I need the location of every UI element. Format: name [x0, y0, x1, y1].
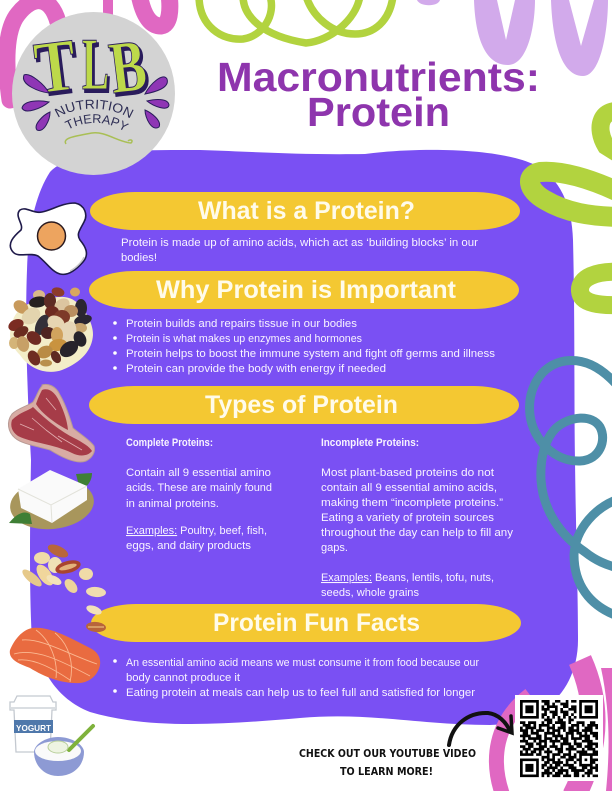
incomplete proteins column: seeds, whole grains — [321, 587, 419, 599]
body text: Protein is made up of amino acids, which act as ‘building blocks’ in our — [121, 237, 479, 249]
logo lettering TLB — [30, 24, 153, 113]
logo — [12, 12, 175, 175]
incomplete proteins column: contain all 9 essential amino acids, — [321, 482, 497, 494]
green squiggle top centre — [199, 0, 393, 43]
logo subtitle: NUTRITION — [54, 100, 134, 118]
call to action text: TO LEARN MORE! — [340, 766, 433, 778]
complete proteins column: eggs, and dairy products — [126, 540, 251, 552]
heading pill — [89, 386, 519, 424]
icon: fried egg — [10, 203, 86, 274]
bullet list: Protein is what makes up enzymes and hormones — [126, 333, 362, 345]
logo lettering TLB: L — [84, 27, 111, 109]
arrow to QR code — [449, 713, 512, 745]
icon: nuts — [20, 542, 106, 633]
bullet list: Protein helps to boost the immune system and fight off germs and illness — [126, 348, 495, 360]
incomplete proteins column: Eating a variety of protein sources — [321, 512, 494, 524]
heading pill: Why Protein is Important — [156, 276, 457, 304]
icon: salmon — [10, 628, 100, 683]
icon: beans — [6, 286, 93, 372]
incomplete proteins column: Most plant-based proteins do not — [321, 467, 494, 479]
icon: tofu — [8, 470, 96, 533]
call to action text: CHECK OUT OUR YOUTUBE VIDEO — [299, 748, 476, 760]
incomplete proteins column: Examples: Beans, lentils, tofu, nuts, — [321, 572, 494, 584]
body text: bodies! — [121, 252, 157, 264]
complete proteins column: in animal proteins. — [126, 498, 219, 510]
heading pill — [91, 604, 521, 642]
purple background panel — [26, 150, 578, 725]
logo: THERAPY — [64, 114, 129, 130]
title: Protein — [307, 89, 450, 135]
bullet list: Eating protein at meals can help us to feel full and satisfied for longer — [126, 687, 476, 699]
bullet list: Protein can provide the body with energy if needed — [126, 363, 386, 375]
QR code — [515, 695, 603, 781]
incomplete proteins column: gaps. — [321, 542, 348, 554]
logo splash drops — [22, 75, 169, 130]
incomplete proteins column: making them “incomplete proteins.” — [321, 497, 504, 509]
heading pill — [90, 192, 520, 230]
heading pill: What is a Protein? — [198, 197, 415, 225]
heading pill: Types of Protein — [205, 391, 398, 419]
incomplete proteins column: Incomplete Proteins: — [321, 437, 419, 449]
icon: steak — [8, 384, 95, 462]
incomplete proteins column: throughout the day can help to fill any — [321, 527, 514, 539]
complete proteins column: Examples: Poultry, beef, fish, — [126, 525, 267, 537]
bullet list: body cannot produce it — [126, 672, 240, 684]
icon: yogurt — [10, 696, 93, 776]
heading pill: Protein Fun Facts — [213, 609, 420, 637]
green squiggle right upper — [530, 111, 612, 305]
lilac squiggle top right — [417, 0, 608, 76]
panel: why protein is important — [89, 271, 519, 375]
heading pill — [89, 271, 519, 309]
logo lettering TLB: B — [107, 27, 153, 113]
pink squiggle bottom right — [496, 660, 612, 791]
logo lettering TLB: B — [105, 24, 151, 110]
complete proteins column: Contain all 9 essential amino — [126, 467, 271, 479]
bullet list — [113, 657, 479, 699]
complete proteins column — [126, 437, 272, 552]
title — [217, 54, 540, 135]
title: Macronutrients: — [217, 54, 540, 100]
bullet list: An essential amino acid means we must consume it from food because our — [126, 657, 479, 669]
body text — [121, 237, 479, 264]
icon: yogurt: YOGURT — [16, 723, 52, 733]
bullet list — [113, 318, 495, 375]
panel: types of protein — [89, 386, 519, 599]
call to action text — [299, 748, 476, 778]
incomplete proteins column — [321, 437, 514, 599]
logo lettering TLB: L — [82, 24, 109, 106]
panel: what is a protein — [90, 192, 520, 264]
complete proteins column: acids. These are mainly found — [126, 482, 272, 494]
panel: protein fun facts — [91, 604, 521, 699]
logo lettering TLB: T — [30, 24, 81, 110]
bullet list: Protein builds and repairs tissue in our bodies — [126, 318, 357, 330]
teal squiggle right — [530, 360, 612, 615]
complete proteins column: Complete Proteins: — [126, 437, 213, 449]
pink squiggle top left — [7, 0, 170, 100]
logo lettering TLB: T — [32, 27, 83, 113]
